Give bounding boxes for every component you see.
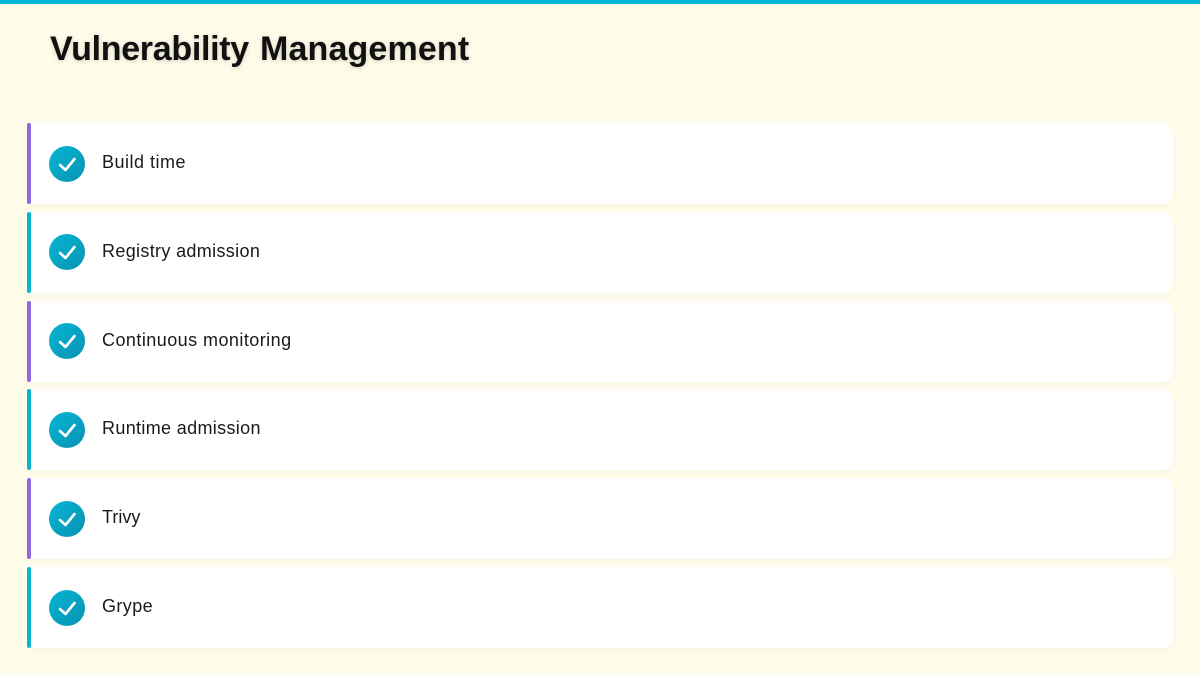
list item: Build time: Build time — [102, 152, 186, 172]
list item: Runtime admission — [27, 389, 1173, 470]
text: Management — [260, 30, 469, 68]
list item: Trivy: Trivy — [102, 507, 140, 527]
icon: check — [49, 146, 85, 182]
list item: Build time — [27, 123, 1173, 204]
icon: check — [49, 412, 85, 448]
list item: Registry admission: Registry admission — [102, 241, 260, 261]
title — [50, 30, 470, 70]
list item: Continuous monitoring: Continuous monitoring — [102, 330, 292, 350]
list item: Continuous monitoring — [27, 301, 1173, 382]
icon: check — [49, 323, 85, 359]
list item: Runtime admission: Runtime admission — [102, 418, 261, 438]
icon: check — [49, 234, 85, 270]
list item: Registry admission — [27, 212, 1173, 293]
top accent bar — [0, 0, 1200, 4]
list item: Trivy — [27, 478, 1173, 559]
icon: check — [49, 590, 85, 626]
icon: check — [49, 501, 85, 537]
text: Vulnerability — [50, 30, 249, 68]
list item: Grype: Grype — [102, 596, 153, 616]
list item: Grype — [27, 567, 1173, 648]
